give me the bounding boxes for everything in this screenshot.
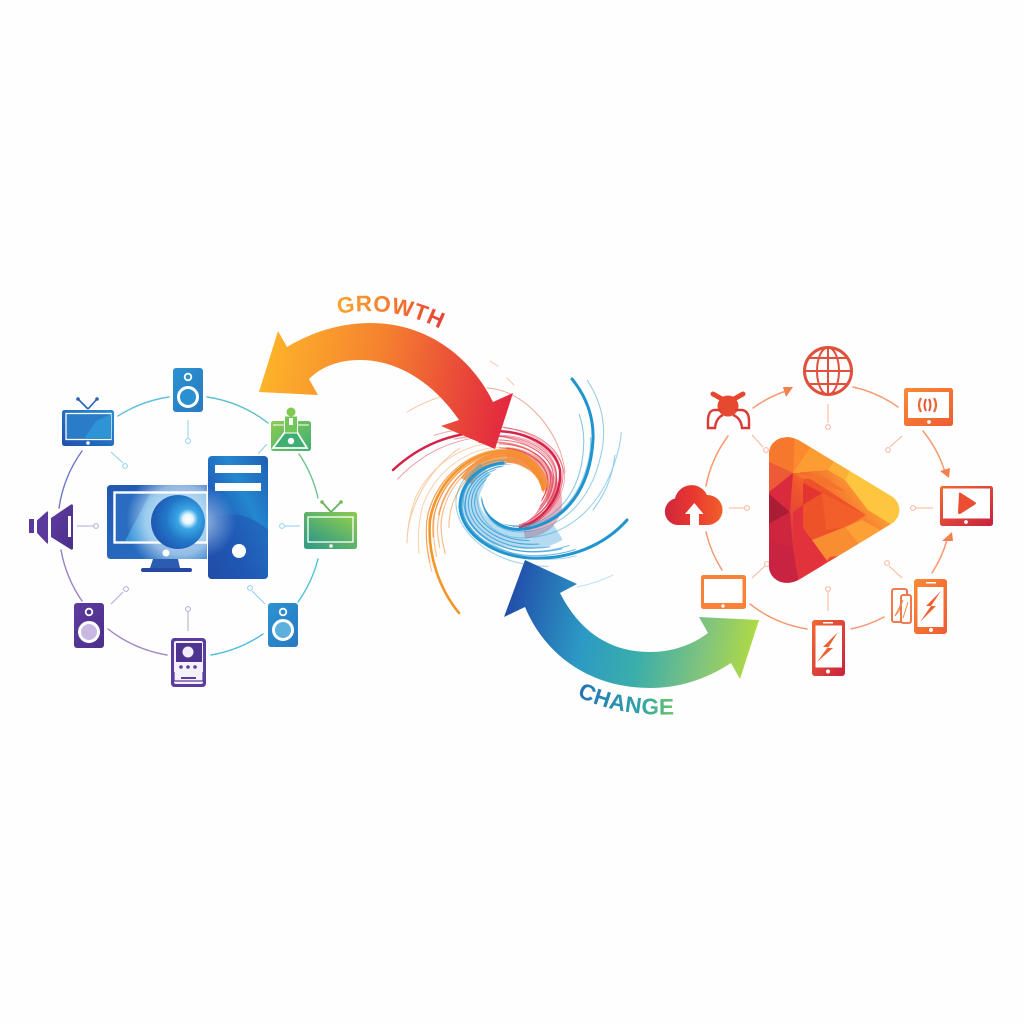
icon: phones group — [892, 579, 947, 634]
icon: tablet bottom left — [701, 575, 746, 609]
central swirl — [386, 352, 637, 632]
icon: speaker bottom right — [268, 603, 298, 647]
swirl: red arm — [386, 410, 572, 536]
icon: speaker top — [173, 368, 203, 412]
icon: tablet signal — [904, 388, 953, 426]
left ring: connecting arcs — [59, 397, 318, 655]
icon: speaker bottom left — [74, 603, 104, 648]
swirl: white centre — [482, 465, 542, 525]
icon: tv top left — [62, 397, 114, 446]
label: CHANGE: CHANGE — [580, 684, 674, 715]
icon: large play triangle — [769, 437, 900, 583]
right ring: spokes — [729, 404, 933, 611]
swirl: blue arms — [448, 352, 637, 579]
icon: desktop computer — [107, 456, 268, 579]
icon: globe — [804, 348, 852, 394]
arrow: growth — [259, 323, 513, 449]
arrow: change — [504, 560, 759, 688]
swirl: orange arm — [387, 422, 559, 632]
big phone — [914, 579, 947, 634]
icon: cloud upload — [665, 485, 723, 525]
swirl: faint outer strands — [407, 361, 615, 587]
icon: media player — [171, 638, 206, 687]
icon: megaphone — [29, 504, 73, 550]
icon: green lighthouse — [271, 408, 311, 451]
right ring: arrowheads — [783, 387, 953, 541]
icon: green tv — [304, 500, 357, 549]
monitor — [107, 485, 207, 572]
infographic: growth and change cycle — [29, 296, 993, 715]
label: GROWTH: GROWTH — [338, 296, 445, 328]
tower case — [208, 456, 268, 579]
globe — [151, 495, 205, 549]
icon: tablet play — [940, 486, 993, 526]
icon: drone — [708, 394, 749, 428]
right ring: connecting arcs — [706, 387, 947, 629]
small phones — [892, 589, 911, 623]
left ring: spokes — [77, 420, 300, 631]
icon: phone bottom — [812, 620, 845, 676]
